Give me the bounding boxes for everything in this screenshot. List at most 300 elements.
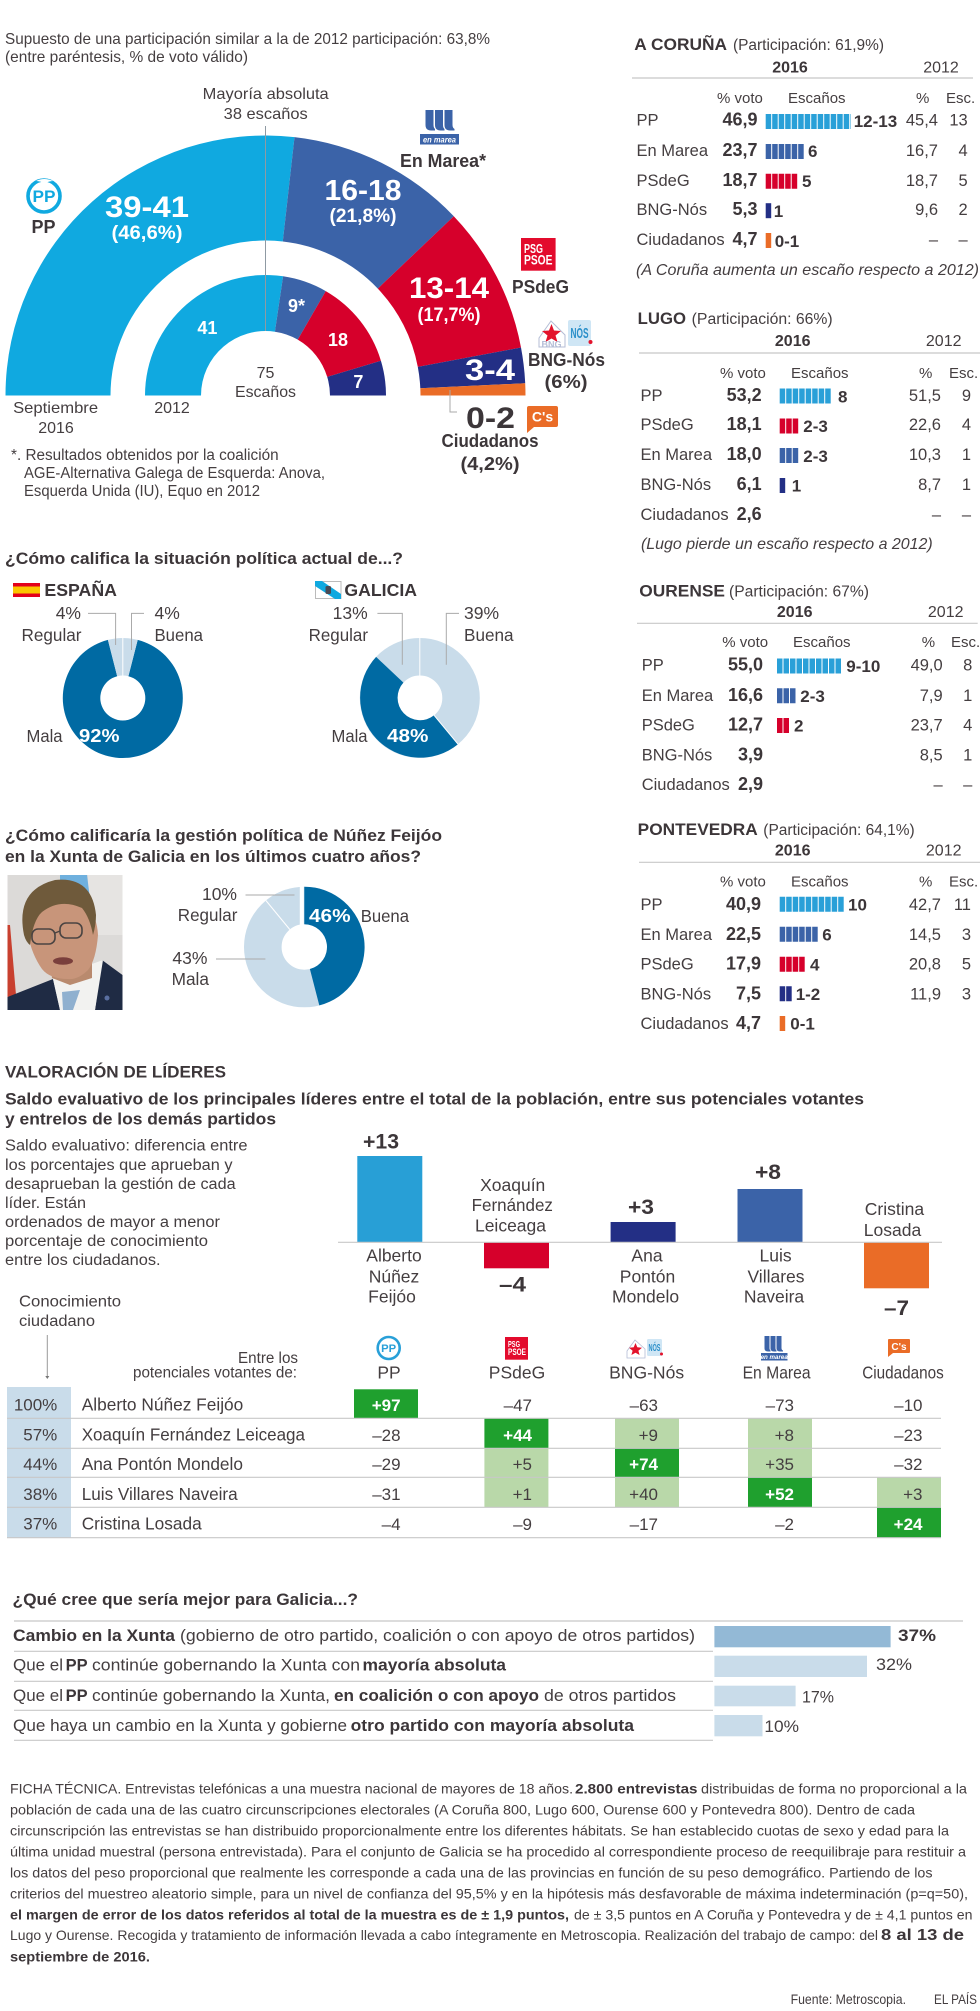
panel: Pontevedra table (638, 821, 980, 1034)
footnote: *. Resultados obtenidos por la coalición (11, 447, 279, 464)
option: PP absolute majority (13, 1655, 912, 1677)
row: PSdeG: PSdeG (640, 955, 694, 973)
row: PSdeG: 17,9 (726, 953, 761, 973)
footnote (11, 447, 325, 500)
donut chart: España: Buena (154, 625, 203, 645)
label: Xoaquín Fernández Leiceaga: Fernández (472, 1195, 553, 1215)
row: PP: 11 (954, 896, 971, 914)
row: PSdeG: 2-3 (803, 417, 828, 436)
row: Ana Pontón Mondelo: 44% (23, 1455, 57, 1474)
label: PP: PP (31, 217, 56, 237)
option: Cambio en la Xunta: (gobierno de otro partido, coalición o con apoyo de otros partidos) (180, 1627, 695, 1645)
text block: technical sheet: criterios del muestreo aleatorio simple, para un nivel de confianza del 95,5% y en la hipótesis más desfavorable de máxima indeterminación (p=q=50), (10, 1885, 968, 1901)
label: Ana Pontón Mondelo (612, 1246, 679, 1307)
row: BNG-Nós (640, 983, 971, 1004)
row: Xoaquín Fernández Leiceaga: 57% (23, 1426, 57, 1445)
row: PSdeG: 5 (959, 172, 968, 190)
row: PP: 13 (949, 112, 968, 130)
row: Ciudadanos (642, 774, 973, 794)
explanatory text: porcentaje de conocimiento (5, 1233, 208, 1250)
row: PP: 42,7 (909, 896, 941, 914)
text block: technical sheet: 8 al 13 de (881, 1927, 964, 1944)
row: BNG-Nós: 11,9 (910, 985, 941, 1003)
row: Xoaquín Fernández Leiceaga: +9 (639, 1426, 658, 1445)
label: total seats (235, 365, 296, 401)
row: PP: PP (640, 387, 663, 405)
column years: 2016 (775, 333, 811, 350)
donut chart: Feijóo: 10% (202, 884, 237, 904)
donut chart: España: Mala (26, 726, 63, 746)
option: PP in coalition: Que el (13, 1687, 63, 1705)
label: Alberto Núñez Feijóo: Núñez (369, 1267, 419, 1287)
heading: en la Xunta de Galicia en los últimos cuatro años? (5, 847, 421, 866)
icon: BNG-Nós logo (539, 320, 592, 350)
footnote: AGE-Alternativa Galega de Esquerda: Anova, (24, 465, 325, 482)
row: Luis Villares Naveira: +3 (903, 1485, 922, 1504)
panel: seat projection hemicycle (5, 31, 605, 500)
column headers: Escaños (791, 873, 849, 890)
row: PSdeG: 2 (794, 716, 803, 736)
heading: LUGO (638, 310, 686, 328)
column headers (717, 90, 975, 107)
donut chart: Galicia: 13% (333, 603, 368, 623)
row: PP (640, 894, 971, 914)
row: Ciudadanos: 2,6 (737, 504, 762, 524)
note: (Lugo pierde un escaño respecto a 2012) (641, 536, 933, 553)
row: En Marea: En Marea (640, 926, 713, 944)
text block: technical sheet: septiembre de 2016. (10, 1948, 150, 1964)
row: Ciudadanos: 4,7 (732, 229, 758, 249)
label: Ana Pontón Mondelo: Pontón (620, 1267, 675, 1287)
label: Xoaquín Fernández Leiceaga (472, 1175, 553, 1236)
option: PP absolute majority: Que el (13, 1657, 63, 1675)
row: Cristina Losada: Cristina Losada (82, 1513, 202, 1533)
subtitle (5, 1091, 864, 1129)
row: Ciudadanos (636, 229, 969, 251)
row: PP: 12-13 (854, 112, 897, 131)
donut chart: Feijóo: 43% (172, 948, 207, 968)
column headers: Escaños (791, 365, 849, 382)
row: En Marea: 4 (959, 142, 968, 160)
value: PP 2016: 39-41 (105, 191, 189, 224)
row: Ciudadanos: Ciudadanos (636, 231, 725, 249)
donut chart: Feijóo (172, 884, 409, 1005)
label: citizen awareness with arrow: ciudadano (19, 1313, 95, 1330)
value: En Marea 2016: 16-18 (324, 175, 402, 207)
icon: Ciudadanos logo: C's (532, 408, 553, 424)
value: PSdeG 2016: 13-14 (409, 272, 489, 305)
column years (632, 60, 973, 78)
option: other party majority: otro partido con mayoría absoluta (351, 1717, 635, 1735)
values: 2012 seats: 18 (328, 330, 348, 350)
row: PSdeG (640, 414, 971, 436)
row: Ciudadanos: 0-1 (790, 1014, 815, 1034)
panel: Lugo table (638, 310, 980, 553)
row: PSdeG: 4 (962, 416, 971, 434)
row: En Marea: 7,9 (920, 687, 943, 705)
row: PSdeG: 5 (962, 955, 971, 973)
heading: (Participación: 64,1%) (763, 822, 915, 839)
row: Ciudadanos: 2,9 (738, 774, 763, 794)
row: En Marea: 1 (963, 687, 972, 705)
row: En Marea (642, 685, 972, 706)
option: PP absolute majority: mayoría absoluta (362, 1657, 507, 1675)
intro text: Supuesto de una participación similar a la de 2012 participación: 63,8% (5, 31, 490, 48)
icon: Ciudadanos small logo (888, 1339, 910, 1357)
text block: technical sheet: última unidad muestral (persona entrevistada). Para el conjunto de Galicia se ha procedido al correspondiente proceso de reequilibraje para restituir a (10, 1844, 966, 1860)
heading (634, 34, 884, 54)
option: PP in coalition: de otros partidos (544, 1687, 676, 1705)
label: Luis Villares Naveira (744, 1246, 805, 1307)
donut chart: Feijóo: Buena (361, 906, 409, 926)
row: Ciudadanos: – (962, 506, 972, 524)
donut chart: Galicia: 39% (464, 603, 499, 623)
row: BNG-Nós (636, 199, 968, 221)
column years (639, 333, 980, 353)
row: Alberto Núñez Feijóo: 100% (14, 1396, 57, 1415)
column labels: parties: Ciudadanos (862, 1362, 944, 1382)
donut chart: Feijóo: Regular (178, 905, 238, 925)
column headers: % (919, 365, 932, 382)
label: Cristina Losada: Cristina (865, 1199, 924, 1219)
chart: 2012 inner arc (145, 275, 386, 396)
portrait: Núñez Feijóo (8, 875, 122, 1010)
row: En Marea: En Marea (642, 687, 714, 705)
row: Ciudadanos: 4,7 (736, 1013, 761, 1033)
row: En Marea (640, 924, 971, 944)
text block: technical sheet: 2.800 entrevistas (575, 1780, 698, 1796)
column headers: Escaños (793, 634, 851, 651)
intro text: (entre paréntesis, % de voto válido) (5, 49, 248, 66)
row: BNG-Nós: BNG-Nós (636, 201, 707, 219)
value: Ciudadanos 2016 (442, 402, 538, 474)
heading (638, 821, 915, 839)
table: backgrounds (7, 1387, 941, 1538)
row: En Marea: 10,3 (909, 446, 941, 464)
row: Alberto Núñez Feijóo: +97 (372, 1396, 401, 1415)
row: PP: 8 (963, 657, 972, 675)
row: En Marea: 6 (822, 926, 832, 944)
label: Alberto Núñez Feijóo: Alberto (366, 1246, 422, 1266)
bar chart: net rating by leader: +3 (628, 1196, 654, 1219)
row: En Marea: 23,7 (722, 140, 758, 160)
row: Ana Pontón Mondelo (23, 1454, 923, 1474)
row: En Marea: En Marea (640, 446, 713, 464)
explanatory text: líder. Están (5, 1195, 86, 1212)
row: PSdeG (636, 170, 968, 191)
donut chart: Galicia: Mala (332, 726, 368, 746)
column headers: % voto (720, 365, 766, 382)
icon: BNG-Nós small logo (627, 1339, 663, 1358)
value: PP 2016 (105, 191, 189, 244)
row: Xoaquín Fernández Leiceaga: Xoaquín Fernández Leiceaga (82, 1425, 305, 1445)
row: PSdeG: 4 (810, 956, 820, 974)
donut chart: Galicia: Buena (464, 625, 514, 645)
row: En Marea: 2-3 (803, 447, 828, 466)
row: Ciudadanos (640, 1013, 815, 1034)
option: other party majority: 10% (764, 1717, 799, 1736)
donut chart: Galicia (309, 603, 514, 758)
row: Luis Villares Naveira: +1 (513, 1485, 532, 1504)
row: PSdeG: PSdeG (640, 416, 694, 434)
row: En Marea: 16,6 (728, 685, 763, 705)
label: Xoaquín Fernández Leiceaga: Xoaquín (480, 1175, 545, 1195)
panel: Feijóo management question (5, 826, 442, 1010)
row: Ciudadanos: – (929, 231, 939, 249)
heading: ¿Qué cree que sería mejor para Galicia...? (12, 1591, 358, 1609)
heading: OURENSE (639, 583, 725, 601)
text block: technical sheet (10, 1780, 972, 1964)
column labels: parties: En Marea (743, 1362, 811, 1382)
option: PP absolute majority: 32% (876, 1655, 912, 1674)
column headers: % (922, 634, 935, 651)
row: Ciudadanos: – (963, 776, 973, 794)
icon: PSdeG small logo: PSG (508, 1339, 520, 1349)
row: En Marea: 22,5 (726, 924, 761, 944)
column years (639, 843, 980, 862)
column headers: % voto (722, 634, 768, 651)
row: En Marea: 18,0 (727, 444, 762, 464)
row: BNG-Nós: BNG-Nós (640, 985, 711, 1003)
label: PSdeG: PSdeG (512, 277, 569, 297)
value: BNG-Nós 2016: 3-4 (465, 354, 515, 387)
bar chart: net rating by leader: –4 (499, 1274, 526, 1297)
row: En Marea: 1 (962, 446, 971, 464)
row: Alberto Núñez Feijóo (14, 1395, 923, 1415)
value: Ciudadanos 2016: Ciudadanos (442, 431, 538, 451)
text block: technical sheet: de ± 3,5 puntos en A Coruña y Pontevedra y de ± 4,1 puntos en (574, 1906, 972, 1922)
row: Alberto Núñez Feijóo: –47 (504, 1396, 532, 1415)
row: PSdeG: 12,7 (728, 715, 763, 735)
column years: 2016 (772, 60, 808, 76)
column headers: % (916, 90, 929, 107)
explanatory text: ordenados de mayor a menor (5, 1214, 220, 1231)
row: Cristina Losada (23, 1513, 923, 1534)
row: PP: 55,0 (728, 655, 763, 675)
row: BNG-Nós: 3,9 (738, 745, 763, 765)
label: total seats: 75 (257, 365, 274, 382)
value: En Marea 2016 (324, 175, 402, 227)
heading: ¿Cómo califica la situación política actual de...? (5, 549, 403, 568)
values: 2012 seats: 7 (353, 372, 363, 392)
icon: En Marea small logo (761, 1336, 788, 1361)
values: 2012 seats (197, 296, 363, 392)
option: other party majority (13, 1715, 799, 1736)
icon: En Marea logo (420, 110, 459, 144)
bar chart: net rating by leader (338, 1130, 942, 1320)
explanatory text: Saldo evaluativo: diferencia entre (5, 1138, 247, 1155)
row: BNG-Nós: 8,7 (918, 476, 941, 494)
heading: (Participación: 66%) (692, 311, 833, 328)
row: Ciudadanos: Ciudadanos (640, 506, 729, 524)
row: BNG-Nós: 1-2 (796, 985, 820, 1004)
label: BNG-Nós (528, 350, 605, 392)
row: PSdeG: 22,6 (909, 416, 941, 434)
row: BNG-Nós (640, 474, 971, 496)
row: Luis Villares Naveira: Luis Villares Naveira (82, 1484, 238, 1504)
option: Cambio en la Xunta: Cambio en la Xunta (13, 1627, 176, 1645)
heading: (Participación: 67%) (729, 584, 869, 601)
row: Cristina Losada: –17 (630, 1515, 658, 1534)
footnote: Esquerda Unida (IU), Equo en 2012 (24, 483, 260, 500)
value: PP 2016: (46,6%) (112, 223, 182, 244)
icon: PSdeG logo: PSOE (524, 252, 552, 268)
row: En Marea: En Marea (636, 142, 709, 160)
donut chart: España: Regular (22, 625, 82, 645)
icon: PP logo (28, 179, 60, 212)
row: Xoaquín Fernández Leiceaga: +44 (503, 1426, 533, 1445)
column years: 2012 (928, 604, 964, 621)
bar chart: net rating by leader: +8 (755, 1161, 781, 1184)
row: Xoaquín Fernández Leiceaga: –28 (372, 1426, 401, 1445)
label: En Marea: En Marea* (400, 151, 486, 171)
subtitle: Saldo evaluativo de los principales líderes entre el total de la población, entre sus potenciales votantes (5, 1091, 864, 1109)
majority line and label: Mayoría absoluta (203, 86, 329, 103)
label: citizen awareness with arrow: Conocimiento (19, 1294, 121, 1311)
row: Ciudadanos: Ciudadanos (642, 776, 730, 794)
option: Cambio en la Xunta (13, 1626, 936, 1647)
row: BNG-Nós (642, 745, 972, 765)
explanatory text: los porcentajes que aprueban y (5, 1157, 233, 1174)
row: PSdeG (642, 715, 972, 736)
majority line and label (203, 86, 329, 331)
row: En Marea: 6 (808, 142, 817, 161)
icon: PSdeG small logo: PSOE (508, 1347, 526, 1357)
label: Alberto Núñez Feijóo: Feijóo (368, 1287, 416, 1307)
row: Cristina Losada: –4 (382, 1515, 401, 1534)
option: other party majority: Que haya un cambio en la Xunta y gobierne (13, 1717, 347, 1735)
label: Luis Villares Naveira: Luis (760, 1246, 792, 1266)
chart: 2016 outer arc (5, 135, 525, 396)
row: BNG-Nós: 6,1 (737, 474, 762, 494)
column headers: % voto (720, 873, 766, 890)
label: Luis Villares Naveira: Naveira (744, 1287, 804, 1307)
label: España: ESPAÑA (44, 579, 117, 600)
icon: flag of Galicia (315, 581, 341, 599)
column headers (720, 873, 978, 890)
text block: technical sheet: FICHA TÉCNICA. Entrevistas telefónicas a una muestra nacional de mayores de 18 años. (10, 1780, 573, 1796)
column years: 2016 (775, 843, 811, 860)
option: PP in coalition (13, 1686, 834, 1707)
row: BNG-Nós: 5,3 (732, 199, 758, 219)
label: BNG-Nós: (6%) (544, 372, 588, 392)
row: PSdeG: 4 (963, 717, 972, 735)
column headers (720, 365, 978, 382)
row: Ciudadanos: – (932, 506, 942, 524)
row: PSdeG (640, 953, 971, 974)
option: PP in coalition: 17% (802, 1688, 834, 1707)
column headers: Esc. (949, 873, 978, 890)
column labels: parties (377, 1362, 944, 1382)
panel: best for Galicia (12, 1591, 963, 1740)
heading (639, 583, 869, 601)
text block: technical sheet: el margen de error de los datos referidos al total de la muestra es de ± 1,9 puntos, (10, 1906, 569, 1922)
value: PSdeG 2016 (409, 272, 489, 326)
row: PP: 8 (838, 388, 847, 406)
row: Ana Pontón Mondelo: +5 (513, 1455, 532, 1474)
label: among potential voters: potenciales votantes de: (133, 1365, 297, 1382)
row: Cristina Losada: 37% (23, 1514, 57, 1533)
text block: technical sheet: circunscripción las entrevistas se han distribuido proporcionalmente entre los diferentes hábitats. Se han establecido cuotas de sexo y edad para la (10, 1822, 949, 1838)
text block: technical sheet: distribuidas de forma no proporcional a la (701, 1780, 967, 1796)
column years: 2012 (926, 843, 962, 860)
majority line and label: 38 escaños (224, 106, 308, 123)
column labels: parties: PP (377, 1362, 401, 1382)
panel: Ourense table (637, 583, 980, 794)
section heading: VALORACIÓN DE LÍDERES (5, 1063, 226, 1082)
row: Xoaquín Fernández Leiceaga: –23 (894, 1426, 922, 1445)
row: PP: 46,9 (722, 110, 758, 130)
value: Ciudadanos 2016: (4,2%) (460, 454, 520, 474)
heading (638, 310, 833, 328)
icon: PSdeG logo (521, 238, 556, 271)
row: En Marea: 3 (962, 926, 971, 944)
row: En Marea: 16,7 (906, 142, 938, 160)
label: September 2016 (13, 400, 98, 437)
row: PSdeG: 18,1 (727, 414, 762, 434)
donut chart: España: 92% (79, 726, 120, 746)
column years (637, 604, 978, 623)
row: BNG-Nós: 1 (774, 202, 783, 221)
label: 2012: 2012 (154, 400, 190, 417)
label: Ana Pontón Mondelo: Ana (631, 1246, 663, 1266)
label: Xoaquín Fernández Leiceaga: Leiceaga (475, 1216, 546, 1236)
row: PP: 45,4 (906, 112, 938, 130)
panel: political situation question (5, 549, 514, 758)
label: Alberto Núñez Feijóo (366, 1246, 422, 1307)
row: PP: 10 (848, 896, 867, 914)
panel: A Coruña table (632, 34, 979, 279)
column labels: parties: PSdeG (489, 1362, 545, 1382)
row: PP: 51,5 (909, 387, 941, 405)
column headers: Esc. (949, 365, 978, 382)
row: Ciudadanos: – (934, 776, 944, 794)
value: Ciudadanos 2016: 0-2 (466, 402, 515, 435)
note: (A Coruña aumenta un escaño respecto a 2012) (636, 262, 979, 279)
row: PP: 49,0 (911, 657, 943, 675)
donut chart: Galicia: 48% (387, 726, 428, 746)
row: Luis Villares Naveira: –31 (372, 1485, 401, 1504)
heading: ¿Cómo calificaría la gestión política de Núñez Feijóo (5, 826, 442, 845)
option: PP in coalition: PP (66, 1687, 88, 1705)
icon: PP small logo (378, 1337, 400, 1359)
column headers: Esc. (951, 634, 980, 651)
row: Ana Pontón Mondelo: –29 (372, 1455, 401, 1474)
donut chart: Feijóo: Mala (172, 969, 209, 989)
label: Luis Villares Naveira: Villares (747, 1267, 805, 1287)
row: PSdeG: 18,7 (722, 170, 758, 190)
row: PP: PP (640, 896, 663, 914)
row: PP: PP (642, 657, 664, 675)
row: En Marea (636, 140, 968, 161)
row: PSdeG: 23,7 (911, 717, 943, 735)
donut chart: Galicia: Regular (309, 625, 368, 645)
donut chart: España: 4% (154, 603, 180, 623)
label: September 2016: Septiembre (13, 400, 98, 417)
row: Alberto Núñez Feijóo: –73 (766, 1396, 794, 1415)
intro text (5, 31, 490, 66)
text block: technical sheet: población de cada una de las cuatro circunscripciones electorales (A Coruña 800, Lugo 600, Ourense 600 y Pontevedra 800). Dentro de cada (10, 1801, 915, 1817)
donut chart: España: 4% (56, 603, 81, 623)
row: Luis Villares Naveira (23, 1484, 923, 1504)
row: Ana Pontón Mondelo: Ana Pontón Mondelo (82, 1454, 243, 1474)
donut chart: España (22, 603, 203, 758)
row: PP: 9 (962, 387, 971, 405)
leader: Ciudadanos (450, 390, 457, 412)
row: PSdeG: PSdeG (636, 172, 690, 190)
icon: Ciudadanos logo (527, 406, 558, 433)
column headers: Escaños (788, 90, 846, 107)
